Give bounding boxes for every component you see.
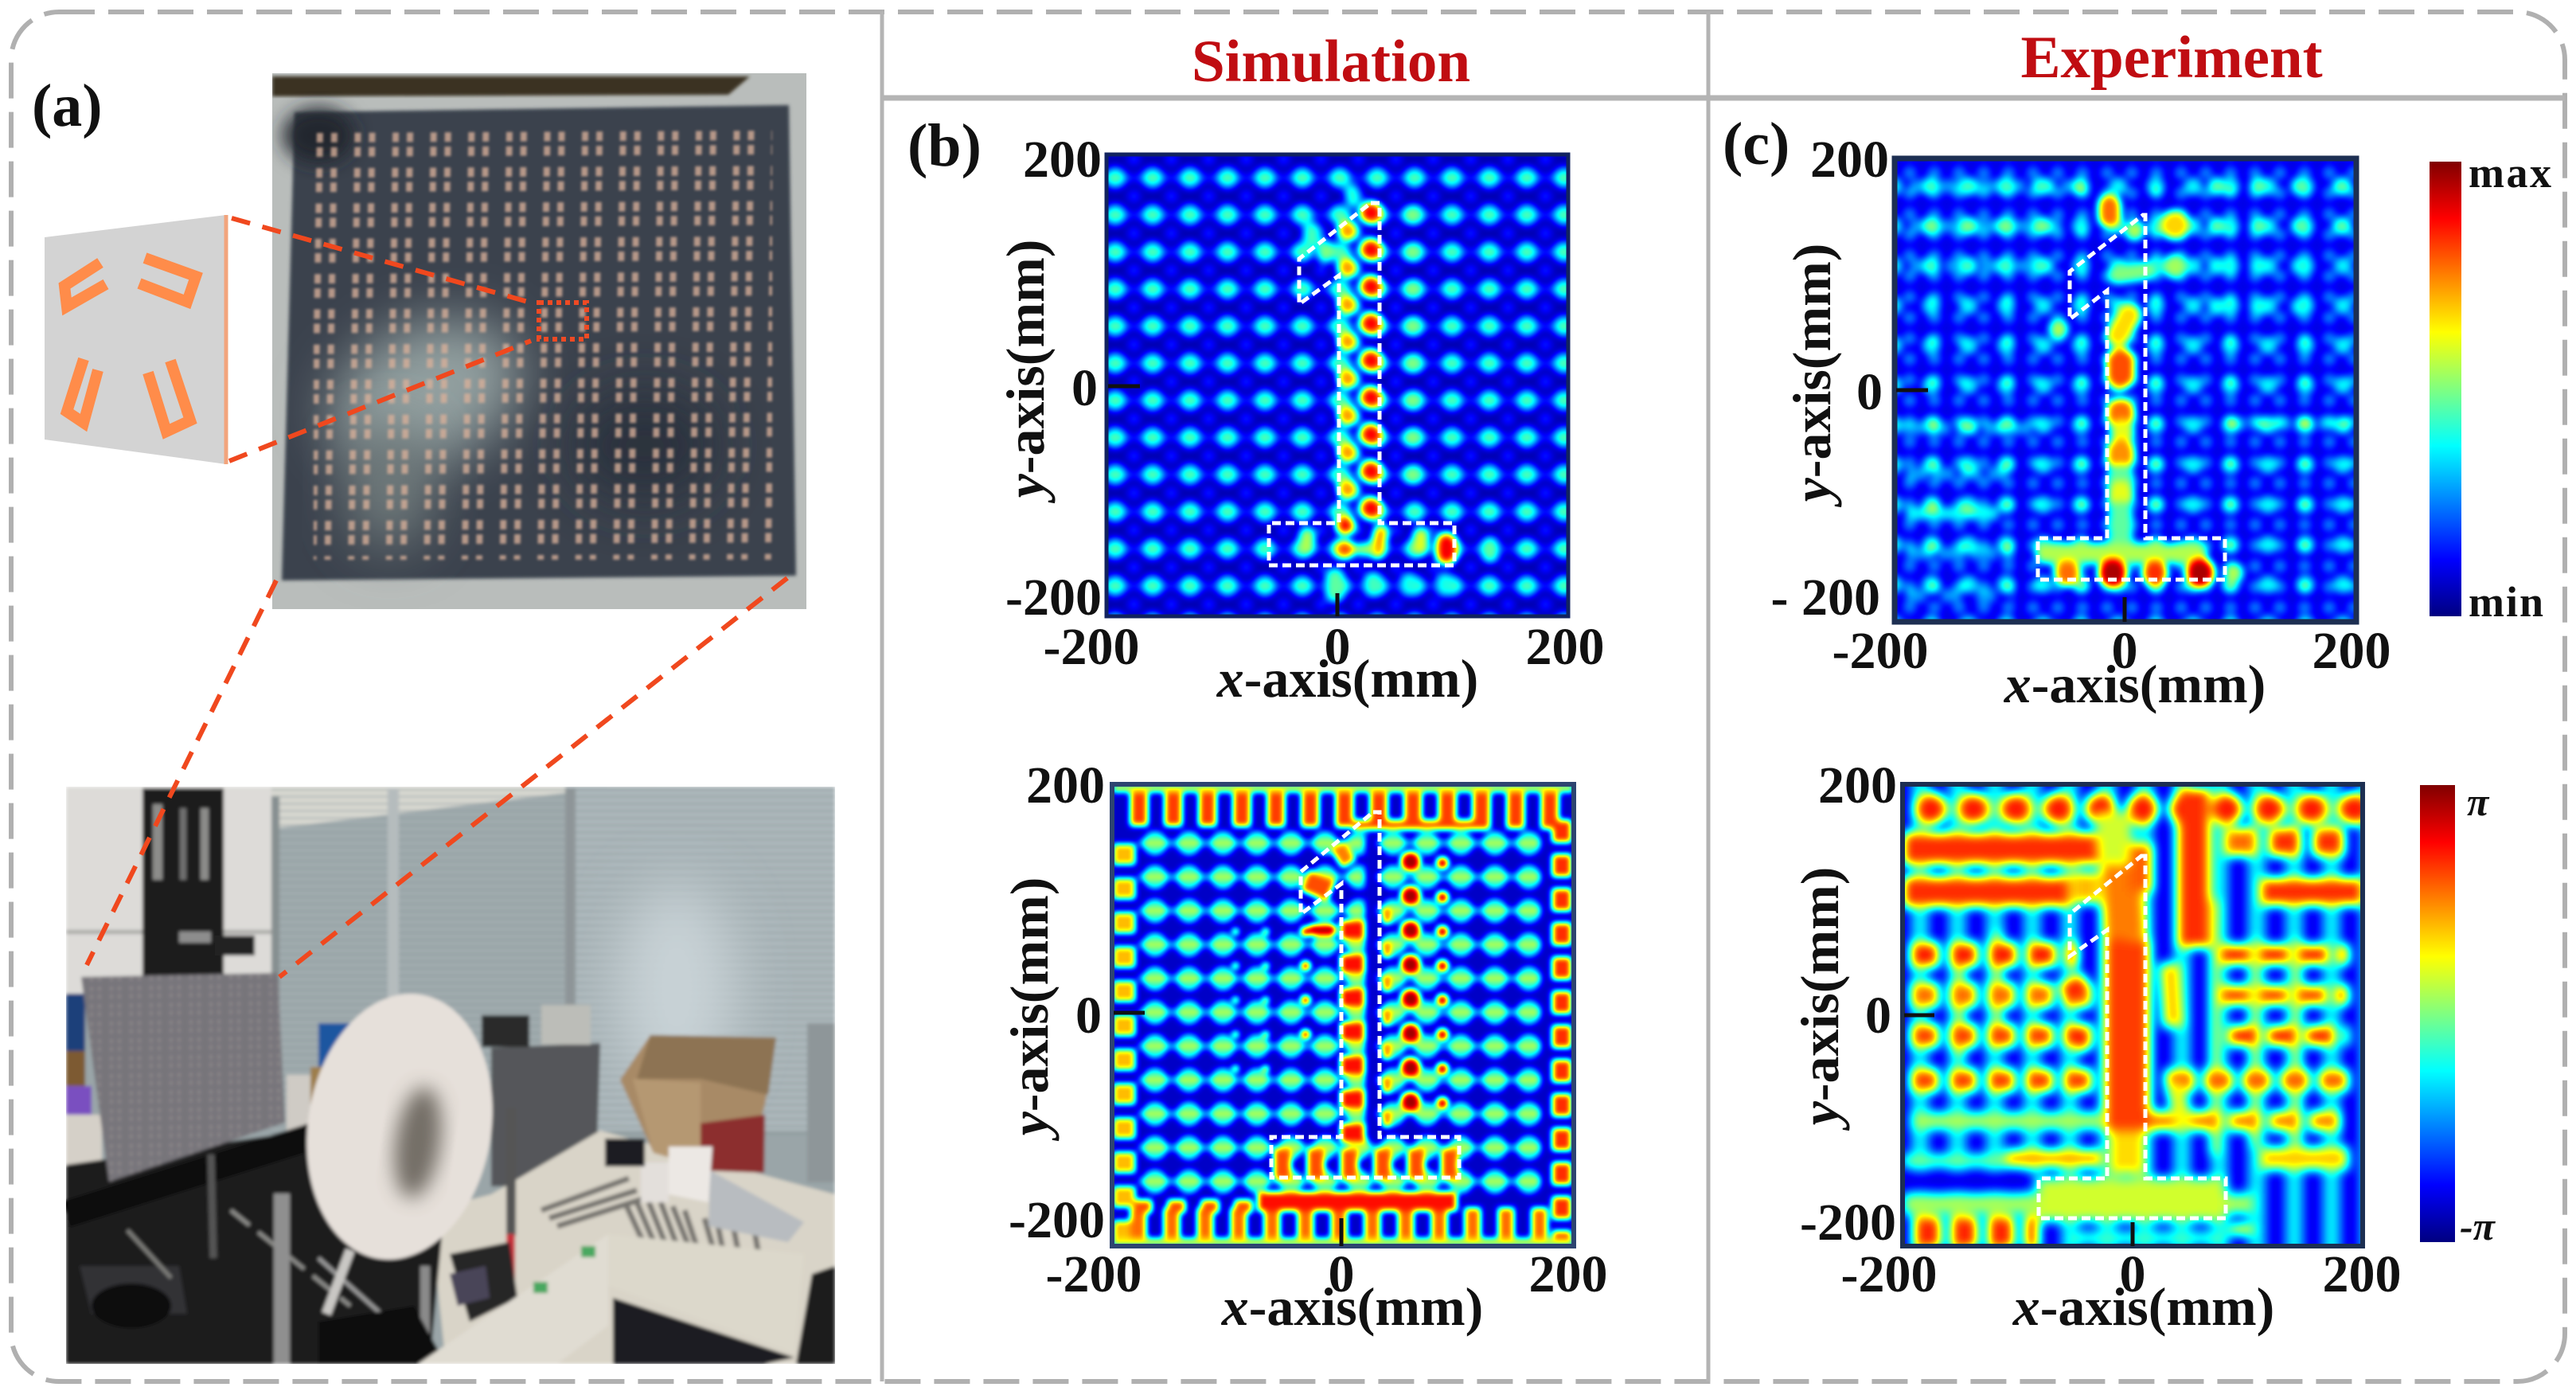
yellow-green band — [1903, 1194, 2253, 1214]
c2 y tick labels: -200 — [1800, 1194, 1896, 1252]
b1 y tick labels: 200 — [1023, 131, 1102, 189]
setup: metal box behind dish — [287, 1005, 600, 1186]
dark red wrap dots, left of digit — [1232, 932, 1239, 1103]
top phase-wrap stripes — [1130, 806, 1560, 809]
c1 digit outline — [2038, 215, 2225, 580]
c1 x tick labels: 200 — [2312, 622, 2391, 680]
c2 x tick labels — [1841, 1245, 2401, 1303]
b1 ticks — [1108, 386, 1337, 616]
c1 y tick labels: 200 — [1810, 131, 1889, 189]
chart: simulated phase — [1096, 768, 1590, 1262]
side column of brighter spots — [1402, 215, 1421, 510]
bottom band and stripes — [1130, 1208, 1552, 1244]
dark band above base — [1903, 1171, 2034, 1192]
digit base — [2039, 1178, 2226, 1221]
b2 x tick labels: 200 — [1528, 1245, 1608, 1303]
c1 y axis title: y-axis(mm) — [1782, 244, 1842, 507]
right phase-wrap blobs — [1552, 820, 1571, 1242]
vertical yellow streaks — [1960, 900, 2297, 1155]
bottom left blobs — [1914, 1217, 2038, 1248]
chart: measured phase — [1887, 768, 2380, 1262]
c2 frame — [1903, 784, 2363, 1246]
hot spots along digit stem, left column — [1337, 231, 1358, 494]
b1 x axis title: x-axis(mm) — [1216, 648, 1478, 709]
chart: measured amplitude — [1879, 143, 2372, 636]
setup: black scanning gantry — [142, 788, 255, 979]
b2 y axis title: y-axis(mm) — [999, 877, 1060, 1141]
c2 x tick labels: 200 — [2323, 1245, 2401, 1303]
lower rows of red dashes — [1911, 943, 2078, 967]
icon: four split-ring elements — [64, 258, 196, 432]
digit base arches — [1274, 1149, 1461, 1179]
label (c): (c) — [1723, 111, 1790, 178]
side blobs — [2169, 963, 2173, 1027]
setup: posts and feed — [274, 1108, 517, 1364]
b1 frame — [1107, 154, 1568, 616]
unit cell inset — [45, 215, 226, 464]
b1 y tick labels: -200 — [1005, 569, 1102, 627]
left phase-wrap blobs — [1113, 844, 1135, 1242]
label (a): (a) — [32, 72, 103, 139]
setup: black optical table and rails — [66, 1131, 446, 1364]
hot spots along digit stem, right column — [1360, 213, 1382, 510]
b2 x tick labels: -200 — [1046, 1245, 1142, 1303]
heading: Simulation: Simulation — [1192, 29, 1470, 95]
b2 frame — [1112, 784, 1574, 1246]
b2 y tick labels: 0 — [1075, 987, 1102, 1045]
b2 y tick labels: -200 — [1009, 1191, 1105, 1249]
c2 y tick labels: 0 — [1865, 987, 1891, 1045]
b1 y tick labels — [1005, 131, 1102, 627]
phase colorbar — [2420, 780, 2496, 1248]
b2 y tick labels: 200 — [1026, 756, 1105, 815]
photo: measurement setup — [66, 787, 835, 1364]
c1 x tick labels: -200 — [1832, 622, 1928, 680]
digit base bright blobs — [2046, 553, 2234, 573]
c2 x tick labels: 0 — [2119, 1245, 2146, 1303]
colorbar pi label: π — [2467, 780, 2490, 824]
zoom lines from unit cell to board — [229, 218, 587, 461]
bright bottom spots — [1307, 191, 1490, 593]
photo: fabricated metasurface board — [272, 73, 806, 609]
b1 digit outline — [1269, 203, 1454, 565]
setup: parabolic reflector dish — [288, 980, 511, 1273]
flag blob — [1313, 876, 1322, 896]
b2 y tick labels — [1009, 756, 1105, 1249]
c1 frame — [1895, 158, 2356, 622]
c1 ticks — [1896, 390, 2125, 622]
b1 y tick labels: 0 — [1071, 359, 1098, 417]
digit stem phase alternation — [1341, 916, 1366, 1151]
b2 ticks — [1114, 1013, 1341, 1246]
colorbar min label: min — [2469, 578, 2543, 626]
amplitude colorbar — [2430, 149, 2551, 626]
colorbar max label: max — [2469, 149, 2551, 197]
c2 x tick labels: -200 — [1841, 1245, 1937, 1303]
upper rows of red blobs — [1931, 793, 2356, 825]
c2 digit outline — [2039, 856, 2226, 1218]
c1 x tick labels: 0 — [2111, 622, 2138, 680]
central column — [2113, 812, 2117, 864]
b2 x tick labels: 0 — [1328, 1245, 1355, 1303]
b1 y axis title: y-axis(mm) — [995, 240, 1056, 503]
hot spots in digit stem — [2059, 205, 2175, 549]
b2 x axis title: x-axis(mm) — [1221, 1276, 1483, 1337]
b2 x tick labels — [1046, 1245, 1608, 1303]
c2 x axis title: x-axis(mm) — [2012, 1276, 2274, 1337]
setup: tools on table — [539, 1135, 804, 1252]
c1 y tick labels: - 200 — [1771, 569, 1880, 627]
c2 y tick labels — [1800, 756, 1897, 1252]
colorbar minus pi label: -π — [2460, 1204, 2496, 1248]
c2 y axis title: y-axis(mm) — [1790, 867, 1850, 1131]
column dividers and header rule — [882, 12, 2565, 1381]
setup: cardboard box — [620, 1035, 776, 1173]
horizontal bands — [1903, 186, 2348, 596]
row of bright spots — [1931, 186, 2348, 307]
chart: simulated amplitude — [1091, 139, 1584, 632]
setup: metasurface board held on stand — [81, 973, 285, 1182]
c1 x axis title: x-axis(mm) — [2004, 654, 2266, 714]
b2 digit outline — [1271, 812, 1459, 1178]
c1 y tick labels — [1771, 131, 1889, 627]
c1 x tick labels — [1832, 622, 2391, 680]
dark red wrap dots, right of digit — [1401, 862, 1420, 1107]
label (b): (b) — [907, 112, 982, 179]
b1 x tick labels: -200 — [1044, 618, 1139, 676]
c1 y tick labels: 0 — [1856, 363, 1883, 421]
setup: table top — [430, 1131, 835, 1364]
b1 x tick labels — [1044, 618, 1605, 676]
heading: Experiment: Experiment — [2020, 25, 2323, 91]
c2 y tick labels: 200 — [1818, 756, 1897, 815]
c2 ticks — [1904, 1015, 2133, 1246]
zoom lines from board to setup photo — [87, 578, 787, 977]
b1 x tick labels: 0 — [1325, 618, 1350, 676]
setup: left clutter — [66, 994, 102, 1166]
setup: white instrument cabinet — [418, 1234, 835, 1364]
b1 x tick labels: 200 — [1525, 618, 1605, 676]
